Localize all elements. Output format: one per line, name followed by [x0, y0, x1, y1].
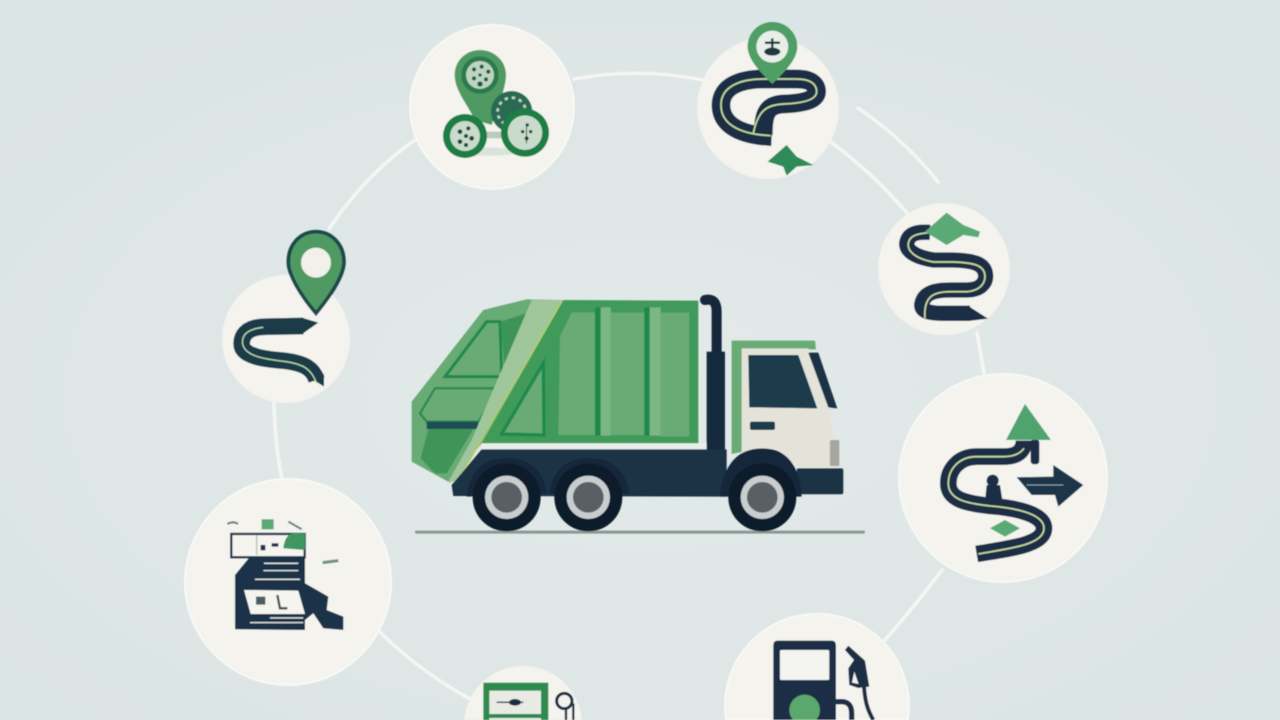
garbage truck — [412, 299, 865, 534]
compactor body — [482, 300, 698, 443]
wheels — [473, 463, 796, 531]
arrow star — [768, 145, 813, 176]
pin — [748, 22, 797, 84]
cab — [732, 341, 816, 454]
node: winding road with green marker — [878, 203, 1010, 335]
road — [721, 79, 817, 137]
node: winding road with arrows — [899, 374, 1107, 582]
node: tyres — [410, 25, 574, 189]
node: document building — [185, 479, 391, 685]
node: road with location pin — [697, 22, 839, 179]
hopper — [412, 299, 563, 483]
chassis — [707, 352, 725, 452]
node: bottom machine — [464, 666, 582, 720]
connecting ring lines — [274, 73, 984, 700]
node: fuel pump — [725, 614, 909, 720]
node: road with location pin left — [222, 232, 350, 403]
exhaust pipe — [705, 300, 717, 353]
wheel arches — [467, 458, 547, 497]
ground line — [415, 531, 865, 534]
